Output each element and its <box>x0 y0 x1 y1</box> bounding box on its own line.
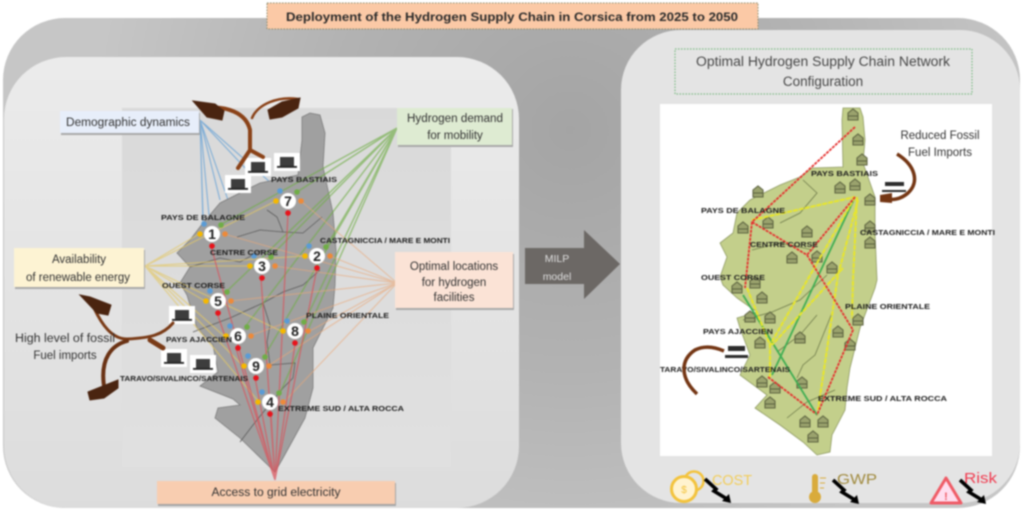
node 2 <box>302 243 333 271</box>
node 1: 1 <box>208 226 216 242</box>
region labels on left map: CASTAGNICCIA / MARE E MONTI <box>320 238 450 245</box>
network links: green <box>743 197 855 415</box>
links: demographic dynamics (blue) <box>200 120 280 224</box>
text: high level of fossil fuel imports: Fuel imports <box>33 350 97 362</box>
region labels on green map: CASTAGNICCIA / MARE E MONTI <box>860 230 995 237</box>
panel: optimal configuration <box>621 30 1020 504</box>
arrow: MILP model <box>525 230 620 299</box>
region labels on left map: PAYS BASTIAIS <box>271 177 337 184</box>
node 7: 7 <box>284 193 292 209</box>
title: Deployment of the Hydrogen Supply Chain in Corsica from 2025 to 2050 <box>286 10 738 24</box>
map: Corsica green <box>720 108 877 455</box>
text: high level of fossil fuel imports: High level of fossil <box>15 333 115 345</box>
indicator: GWP down <box>809 471 877 504</box>
indicator: cost down: $ <box>681 485 687 496</box>
panel: inputs and Corsica map <box>4 57 519 508</box>
network links: yellow <box>747 197 858 410</box>
text: reduced fossil fuel imports: Reduced Fossil <box>900 130 980 142</box>
node 4 <box>255 389 286 417</box>
region labels on left map: CENTRE CORSE <box>210 250 278 257</box>
icons: fossil fuel plants west <box>161 306 216 373</box>
node 1 <box>197 221 228 249</box>
region labels on left map: PLAINE ORIENTALE <box>306 313 389 320</box>
infrastructure icons on green map <box>732 109 875 442</box>
region labels on left map: PAYS AJACCIEN <box>166 337 232 344</box>
box: hydrogen demand for mobility <box>397 108 513 147</box>
node 5: 5 <box>214 293 222 309</box>
links: hydrogen demand (green) <box>220 128 397 393</box>
text: reduced fossil fuel imports <box>900 130 980 159</box>
arrow: MILP model: MILP <box>545 253 569 265</box>
box: availability of renewable energy <box>14 248 145 289</box>
region labels on left map: PAYS DE BALAGNE <box>161 215 245 222</box>
region labels on left map <box>120 177 450 413</box>
node 6: 6 <box>234 328 242 344</box>
icon and arrow: reduced imports south <box>684 346 748 394</box>
box: access to grid electricity: Access to grid electricity <box>212 487 341 499</box>
node 4: 4 <box>266 394 274 410</box>
region labels on green map: PLAINE ORIENTALE <box>845 304 930 311</box>
region labels on left map: TARAVO/SIVALINCO/SARTENAIS <box>120 376 248 383</box>
links: renewable energy (yellow) <box>145 201 305 402</box>
box: optimal locations for hydrogen facilities: for hydrogen <box>422 277 486 289</box>
region labels on green map: OUEST CORSE <box>701 275 765 282</box>
node 2: 2 <box>313 248 321 264</box>
text: high level of fossil fuel imports <box>15 333 115 362</box>
node 3 <box>247 253 278 281</box>
region labels on green map: PAYS AJACCIEN <box>703 329 773 336</box>
icons: fossil fuel plants north <box>225 153 300 193</box>
icon and arrow: reduced imports north <box>880 154 915 203</box>
heading: optimal network configuration <box>675 49 972 94</box>
links: grid electricity (red) <box>211 213 317 480</box>
map: Corsica grey <box>177 113 336 472</box>
indicator: cost down <box>672 472 752 503</box>
node 6 <box>223 323 254 351</box>
heading: optimal network configuration: Optimal Hydrogen Supply Chain Network <box>696 54 950 69</box>
region labels on green map: PAYS BASTIAIS <box>811 171 878 178</box>
node 9 <box>241 353 272 381</box>
indicator: cost down: COST <box>712 472 752 489</box>
node 3: 3 <box>258 258 266 274</box>
box: demographic dynamics <box>60 111 200 135</box>
region labels on left map: OUEST CORSE <box>162 283 225 290</box>
box: demographic dynamics: Demographic dynamics <box>66 117 190 129</box>
links: optimal locations (orange) <box>224 201 397 402</box>
heading: optimal network configuration: Configuration <box>783 74 863 89</box>
indicator: risk down: Risk <box>964 470 998 487</box>
network links: red <box>745 127 855 415</box>
node 8 <box>280 318 311 346</box>
box: hydrogen demand for mobility: Hydrogen demand <box>407 113 503 125</box>
indicator: risk down: ! <box>944 491 948 503</box>
region labels on green map: TARAVO/SIVALINCO/SARTENAIS <box>660 367 790 374</box>
node 5 <box>203 288 234 316</box>
indicator: GWP down: GWP <box>837 471 877 488</box>
node 8: 8 <box>291 323 299 339</box>
region labels on green map: EXTREME SUD / ALTA ROCCA <box>818 396 947 403</box>
node 9: 9 <box>252 358 260 374</box>
box: optimal locations for hydrogen facilities <box>395 252 514 310</box>
region labels on green map: CENTRE CORSE <box>750 242 818 249</box>
box: availability of renewable energy: of renewable energy <box>26 272 130 284</box>
region labels on left map: EXTREME SUD / ALTA ROCCA <box>278 406 404 413</box>
box: hydrogen demand for mobility: for mobility <box>427 130 483 142</box>
indicator: risk down <box>931 470 998 504</box>
box: availability of renewable energy: Availability <box>52 254 106 266</box>
title <box>267 3 758 29</box>
arrows: brown west <box>80 295 173 400</box>
box: optimal locations for hydrogen facilities: Optimal locations <box>410 261 498 273</box>
node 7 <box>273 188 304 216</box>
box: access to grid electricity <box>157 481 396 506</box>
region labels on green map: PAYS DE BALAGNE <box>701 208 785 215</box>
box: optimal locations for hydrogen facilities: facilities <box>434 292 475 304</box>
white map background <box>660 104 992 456</box>
region labels on green map <box>660 171 995 403</box>
arrow: MILP model: model <box>543 271 571 283</box>
text: reduced fossil fuel imports: Fuel Imports <box>908 147 972 159</box>
arrows: brown north <box>193 98 300 168</box>
